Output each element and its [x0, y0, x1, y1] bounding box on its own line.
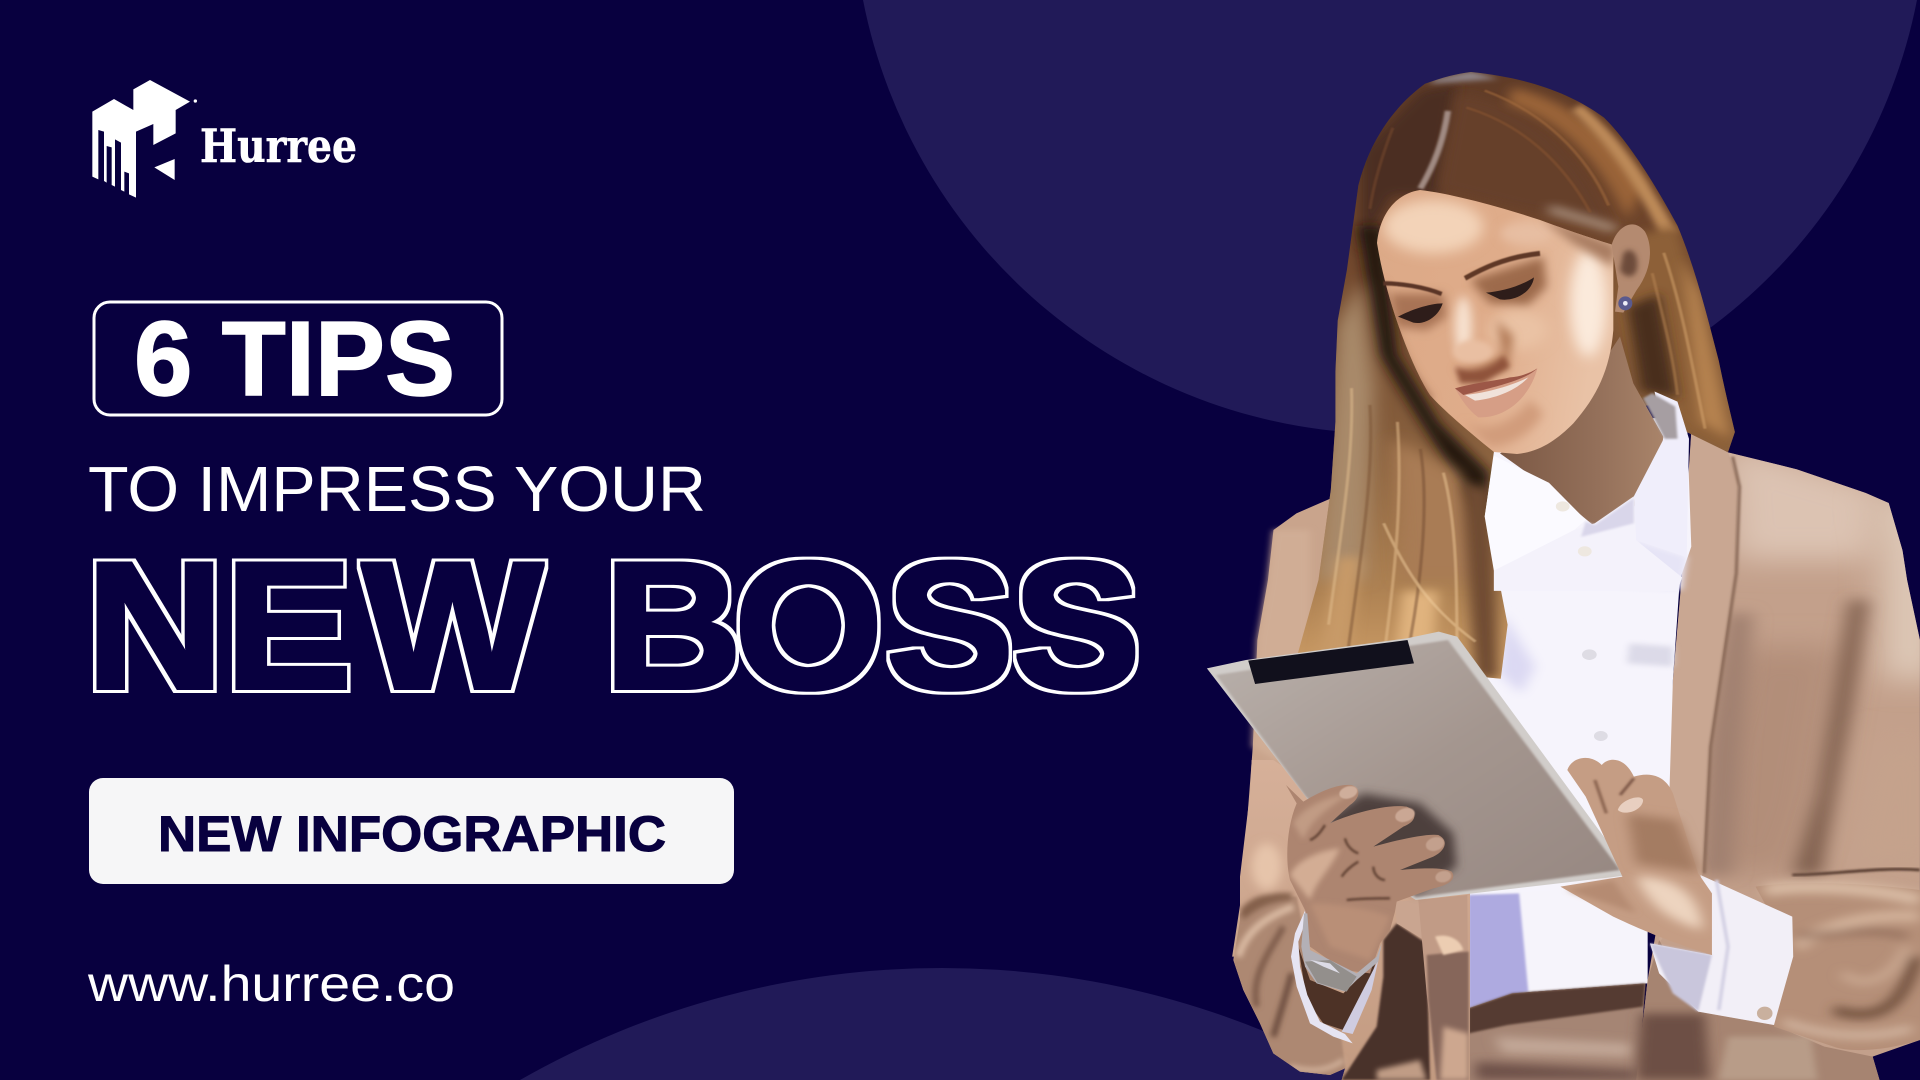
jacket left shoulder and arm: [1232, 498, 1485, 957]
lower shirt and trousers: [1469, 885, 1648, 1080]
hair: [1296, 71, 1735, 679]
facial features: [1383, 253, 1540, 417]
left sleeve, jacket front: [1233, 760, 1470, 1080]
new infographic button: NEW INFOGRAPHIC: [158, 806, 666, 862]
subheading: TO IMPRESS YOUR: [88, 453, 706, 525]
logo wordmark: Hurree: [200, 119, 357, 173]
outlined headline: NEW BOSS: [86, 524, 1141, 727]
bottom background circle: [520, 968, 1364, 1080]
new infographic button: [89, 778, 734, 884]
tablet: [1207, 632, 1627, 900]
photo: woman with tablet: [1207, 71, 1920, 1080]
lower right jacket panel: [1636, 940, 1880, 1080]
left hand holding tablet: [1286, 784, 1453, 973]
neck: [1500, 337, 1663, 527]
large background circle: [863, 0, 1917, 434]
rolled right sleeve: [1756, 883, 1920, 1050]
shirt collar right: [1634, 391, 1689, 557]
shirt: [1430, 413, 1691, 900]
6 tips badge: 6 TIPS: [134, 300, 455, 418]
ear and earring: [1612, 224, 1650, 313]
hand shadow on tablet: [1323, 793, 1457, 893]
wristwatch: [1301, 913, 1382, 992]
shirt collar left: [1485, 456, 1682, 591]
left shirt cuff: [1291, 908, 1378, 1043]
website url: www.hurree.co: [87, 956, 455, 1012]
logo mark: [92, 80, 197, 198]
right cuff: [1650, 875, 1793, 1025]
jacket right side: [1636, 432, 1920, 1080]
right hand on tablet: [1560, 758, 1712, 955]
face: [1377, 190, 1617, 454]
